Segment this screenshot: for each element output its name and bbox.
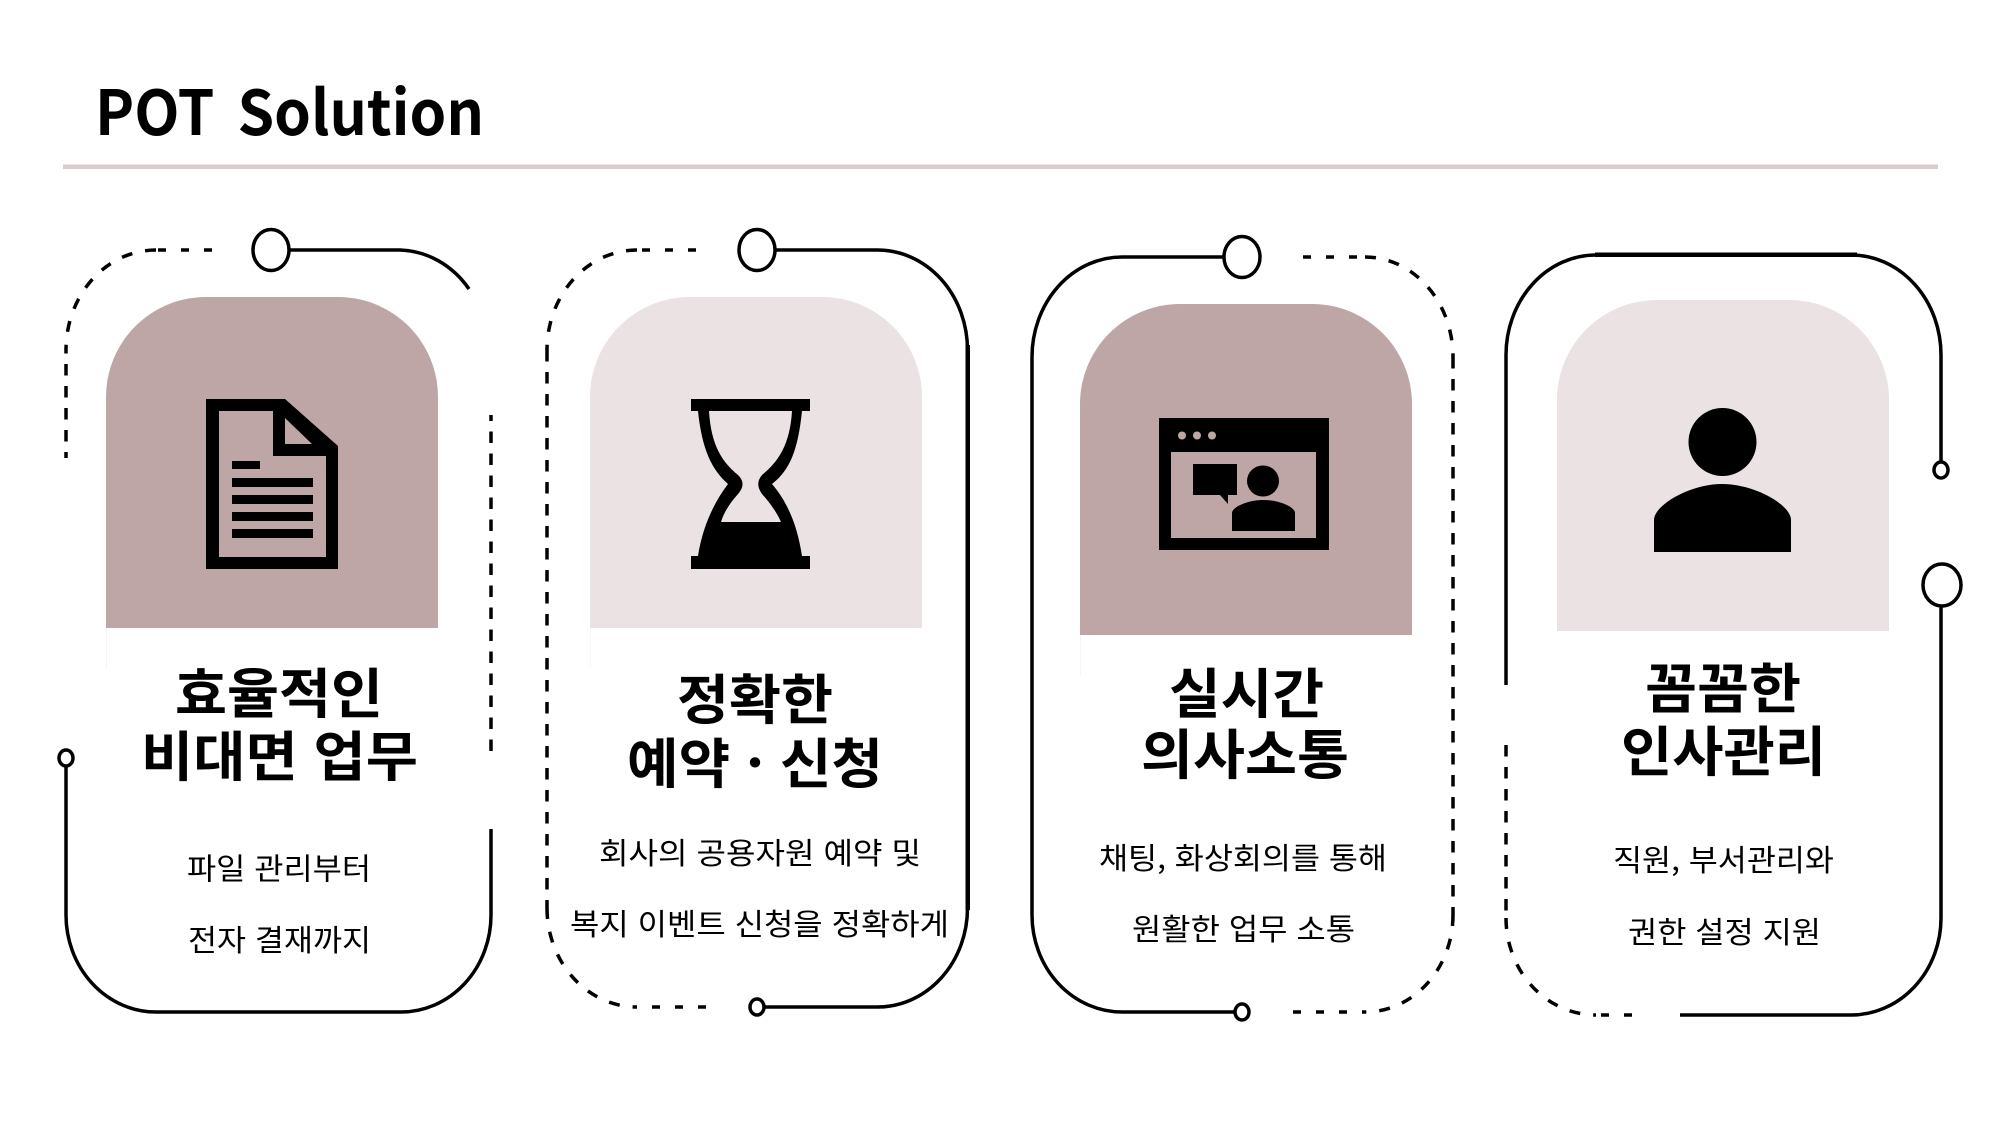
icon: document — [206, 399, 338, 569]
icon: hourglass — [691, 399, 810, 569]
heading: panel 3 — [1141, 650, 1349, 790]
panel 1 arch background — [106, 297, 438, 628]
panel: thorough HR management — [1506, 252, 1961, 1015]
description: panel 4: 권한 설정 지원 — [1628, 908, 1821, 952]
description: panel 2 — [570, 829, 949, 944]
heading: panel 1 — [141, 650, 418, 792]
panel: real-time communication — [1032, 236, 1453, 1020]
heading: panel 4: 인사관리 — [1621, 708, 1826, 787]
panel 3 arch background — [1080, 304, 1412, 635]
icon: person — [1654, 408, 1791, 552]
heading: panel 2: 정확한 — [677, 656, 833, 735]
frame: panel 4 outline — [1506, 252, 1961, 1015]
frame: panel 2 outline — [547, 230, 970, 1015]
heading: panel 4 — [1621, 645, 1826, 787]
description: panel 1 — [187, 844, 371, 960]
frame: panel 3 outline — [1032, 236, 1453, 1020]
heading: panel 1: 효율적인 — [175, 650, 383, 729]
description: panel 3 — [1099, 834, 1387, 949]
heading: panel 4: 꼼꼼한 — [1645, 645, 1801, 724]
title underline — [63, 164, 1938, 169]
description: panel 4: 직원, 부서관리와 — [1613, 836, 1834, 880]
icon: video chat window — [1159, 418, 1329, 550]
panel: efficient remote work — [59, 230, 491, 1012]
description: panel 2: 회사의 공용자원 예약 및 — [599, 829, 921, 873]
description: panel 2: 복지 이벤트 신청을 정확하게 — [570, 900, 949, 944]
panel: accurate booking — [547, 230, 970, 1015]
heading: panel 2: 예약 · 신청 — [627, 720, 883, 799]
heading: panel 3: 실시간 — [1169, 650, 1324, 729]
panel 2 arch background — [590, 297, 922, 628]
description: panel 3: 채팅, 화상회의를 통해 — [1099, 834, 1387, 878]
title: POT Solution — [95, 63, 484, 153]
description: panel 1: 전자 결재까지 — [188, 916, 371, 960]
description: panel 1: 파일 관리부터 — [187, 844, 371, 888]
heading: panel 2 — [627, 656, 883, 799]
description: panel 4 — [1613, 836, 1834, 952]
description: panel 3: 원활한 업무 소통 — [1132, 905, 1355, 949]
heading: panel 3: 의사소통 — [1141, 711, 1349, 790]
panel 4 arch background — [1557, 300, 1889, 631]
frame: panel 1 outline — [59, 230, 491, 1012]
heading: panel 1: 비대면 업무 — [141, 713, 418, 792]
